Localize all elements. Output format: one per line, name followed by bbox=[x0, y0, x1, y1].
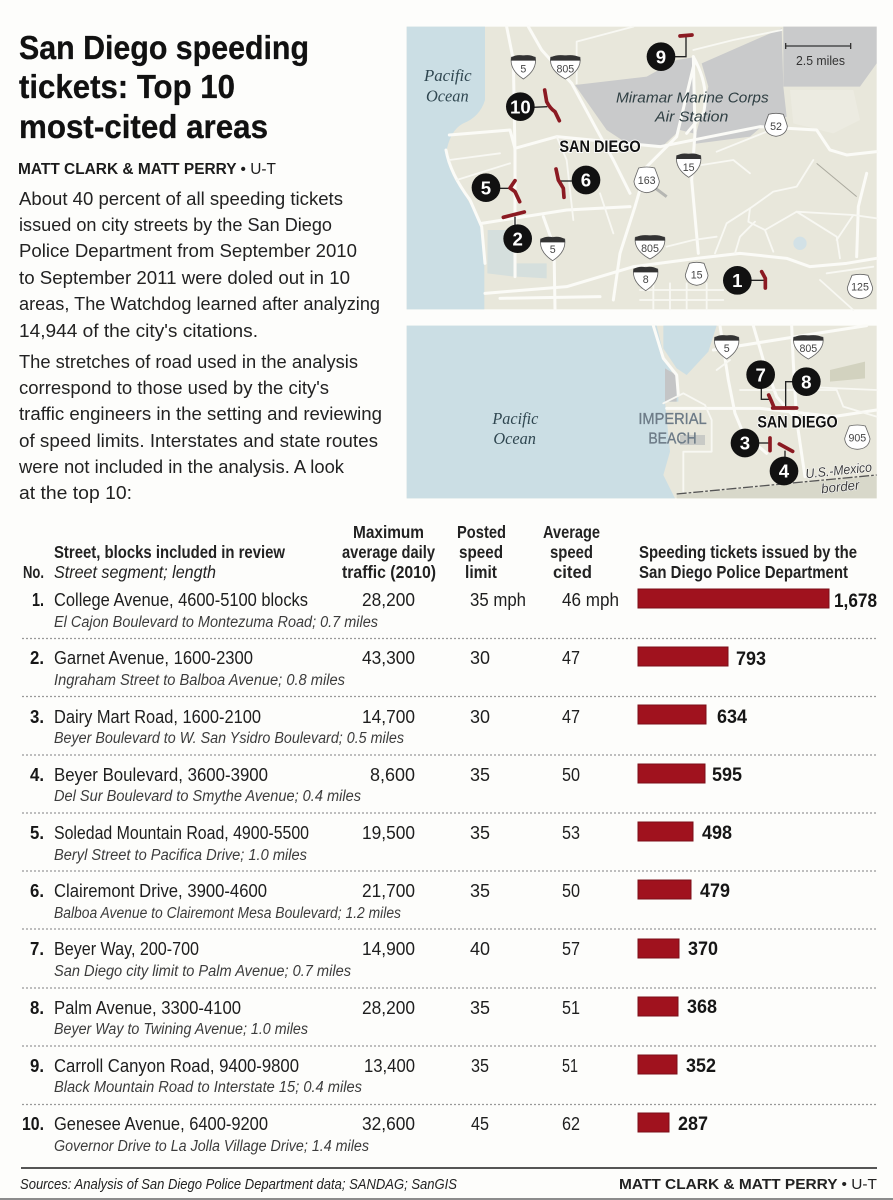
marker 1: College Avenue bbox=[723, 266, 765, 295]
footer: credit: MATT CLARK & MATT PERRY • U-T bbox=[619, 1177, 877, 1193]
bar: 352 tickets bbox=[638, 1055, 677, 1074]
marker 1: College Avenue: 1 bbox=[732, 270, 743, 291]
marker 8: Palm Avenue: 8 bbox=[801, 371, 812, 392]
scale bar bbox=[786, 43, 851, 68]
table header: cited bbox=[553, 562, 592, 582]
row 7: Beyer Way: San Diego city limit to Palm Avenue; 0.7 miles bbox=[54, 963, 351, 980]
row 10: Genesee Avenue bbox=[22, 1113, 708, 1155]
icon: interstate 805 shield bbox=[793, 335, 823, 359]
marker 2: Garnet Avenue: 2 bbox=[512, 228, 523, 249]
row 2: Garnet Avenue: 30 bbox=[470, 647, 490, 668]
row 6: Clairemont Drive bbox=[30, 880, 730, 922]
row 4: Beyer Boulevard: Beyer Boulevard, 3600-3900 bbox=[54, 764, 268, 785]
row 6: Clairemont Drive: 6. bbox=[30, 880, 44, 901]
label: Imperial Beach: BEACH bbox=[648, 430, 697, 447]
row 10: Genesee Avenue: Genesee Avenue, 6400-9200 bbox=[54, 1113, 268, 1134]
icon: interstate 5 shield bbox=[714, 335, 739, 359]
marker 9: Carroll Canyon Road: 9 bbox=[656, 46, 666, 67]
text block: intro paragraph: issued on city streets by the San Diego bbox=[19, 214, 332, 235]
marker 7: Beyer Way: 7 bbox=[755, 364, 766, 385]
row 1: College Avenue: 46 mph bbox=[562, 589, 619, 610]
row 8: Palm Avenue: 368 bbox=[687, 997, 717, 1018]
row 5: Soledad Mountain Road: 35 bbox=[470, 822, 490, 843]
row 8: Palm Avenue: 51 bbox=[562, 997, 580, 1018]
row 3: Dairy Mart Road: 3. bbox=[30, 706, 44, 727]
row 5: Soledad Mountain Road: Beryl Street to Pacifica Drive; 1.0 miles bbox=[54, 847, 307, 864]
row 7: Beyer Way: 14,900 bbox=[362, 938, 415, 959]
row 9: Carroll Canyon Road: 352 bbox=[686, 1056, 716, 1077]
row 2: Garnet Avenue: 2. bbox=[30, 647, 44, 668]
text block: intro paragraph: areas, The Watchdog learned after analyzing bbox=[19, 293, 380, 314]
marker 5: Soledad Mountain Road bbox=[472, 173, 520, 202]
row 3: Dairy Mart Road: Beyer Boulevard to W. San Ysidro Boulevard; 0.5 miles bbox=[54, 730, 404, 747]
marker 3: Dairy Mart Road: 3 bbox=[740, 433, 750, 454]
row 7: Beyer Way: 40 bbox=[470, 938, 490, 959]
text block: intro paragraph: to September 2011 were doled out in 10 bbox=[19, 267, 350, 288]
row 2: Garnet Avenue: Ingraham Street to Balboa Avenue; 0.8 miles bbox=[54, 672, 345, 689]
row 4: Beyer Boulevard: 50 bbox=[562, 764, 580, 785]
icon: route 905 shield bbox=[845, 425, 870, 449]
marker 5: Soledad Mountain Road: 5 bbox=[481, 177, 491, 198]
row 2: Garnet Avenue: 793 bbox=[736, 649, 766, 670]
row 8: Palm Avenue: 28,200 bbox=[362, 997, 415, 1018]
table header: average daily bbox=[342, 542, 435, 562]
text block: intro paragraph: About 40 percent of all speeding tickets bbox=[19, 188, 343, 209]
table header: Street segment; length bbox=[54, 562, 216, 582]
row 2: Garnet Avenue: 43,300 bbox=[362, 647, 415, 668]
row 3: Dairy Mart Road: Dairy Mart Road, 1600-2100 bbox=[54, 706, 261, 727]
row 8: Palm Avenue: 35 bbox=[470, 997, 490, 1018]
icon: route 163 shield bbox=[634, 167, 659, 193]
icon: interstate 805 shield: 805 bbox=[556, 64, 574, 76]
map: south San Diego bbox=[407, 326, 877, 498]
row 4: Beyer Boulevard: 8,600 bbox=[370, 764, 415, 785]
label: Imperial Beach: IMPERIAL bbox=[638, 411, 707, 428]
scale bar: 2.5 miles bbox=[796, 54, 845, 68]
row 2: Garnet Avenue bbox=[30, 647, 766, 689]
bar: 368 tickets bbox=[638, 997, 678, 1016]
icon: interstate 805 shield south: 805 bbox=[641, 243, 659, 255]
marker 7: Beyer Way bbox=[746, 360, 775, 407]
row 6: Clairemont Drive: 35 bbox=[470, 880, 490, 901]
row 9: Carroll Canyon Road: 35 bbox=[471, 1055, 489, 1076]
icon: interstate 5 shield south bbox=[540, 237, 565, 261]
row 9: Carroll Canyon Road: Black Mountain Road to Interstate 15; 0.4 miles bbox=[54, 1079, 362, 1096]
label: Pacific Ocean: Pacific bbox=[491, 409, 539, 428]
text block: methodology paragraph bbox=[18, 351, 382, 503]
bar: 498 tickets bbox=[638, 822, 693, 841]
icon: route 163 shield: 163 bbox=[638, 175, 656, 187]
label: Pacific Ocean: Pacific bbox=[423, 66, 472, 85]
row 1: College Avenue: College Avenue, 4600-5100 blocks bbox=[54, 589, 308, 610]
row 8: Palm Avenue bbox=[30, 997, 717, 1038]
table header: Average bbox=[543, 522, 600, 542]
row 7: Beyer Way: 57 bbox=[562, 938, 580, 959]
marker 9: Carroll Canyon Road bbox=[647, 35, 692, 71]
row 1: College Avenue: 1. bbox=[32, 589, 44, 610]
row 3: Dairy Mart Road: 30 bbox=[470, 706, 490, 727]
title: San Diego speeding bbox=[19, 29, 309, 66]
row 1: College Avenue: 1,678 bbox=[834, 591, 877, 612]
row 9: Carroll Canyon Road bbox=[30, 1055, 716, 1096]
icon: route 905 shield: 905 bbox=[848, 432, 866, 444]
bar: 793 tickets bbox=[638, 647, 728, 666]
text block: methodology paragraph: at the top 10: bbox=[19, 482, 132, 503]
row 3: Dairy Mart Road: 47 bbox=[562, 706, 580, 727]
row 7: Beyer Way: 370 bbox=[688, 939, 718, 960]
icon: interstate 5 shield: 5 bbox=[520, 64, 526, 76]
row 5: Soledad Mountain Road bbox=[30, 822, 732, 864]
text block: intro paragraph: Police Department from September 2010 bbox=[19, 240, 357, 261]
icon: route 15 shield bbox=[685, 262, 708, 285]
text block: methodology paragraph: of speed limits. Interstates and state routes bbox=[19, 430, 378, 451]
icon: route 125 shield bbox=[847, 274, 873, 299]
label: Imperial Beach bbox=[638, 411, 707, 447]
label: Miramar Marine Corps Air Station: Air Station bbox=[654, 109, 728, 126]
table header: Street, blocks included in review bbox=[54, 542, 285, 562]
row 1: College Avenue: El Cajon Boulevard to Montezuma Road; 0.7 miles bbox=[54, 614, 378, 631]
text block: methodology paragraph: traffic engineers in the setting and reviewing bbox=[19, 403, 382, 424]
label: Miramar Marine Corps Air Station bbox=[616, 90, 769, 126]
table header: No. bbox=[23, 562, 44, 582]
table header: speed bbox=[550, 542, 593, 562]
row 2: Garnet Avenue: Garnet Avenue, 1600-2300 bbox=[54, 647, 253, 668]
row 9: Carroll Canyon Road: 13,400 bbox=[364, 1055, 415, 1076]
icon: interstate 15 shield bbox=[676, 153, 701, 177]
row 6: Clairemont Drive: Clairemont Drive, 3900-4600 bbox=[54, 880, 267, 901]
row 8: Palm Avenue: Beyer Way to Twining Avenue; 1.0 miles bbox=[54, 1021, 308, 1038]
table header: Maximum bbox=[353, 522, 424, 542]
icon: interstate 805 shield south bbox=[635, 235, 665, 259]
text block: methodology paragraph: correspond to those used by the city's bbox=[19, 377, 329, 398]
label: San Diego: SAN DIEGO bbox=[757, 413, 838, 432]
table header: speed bbox=[459, 542, 503, 562]
row 6: Clairemont Drive: 479 bbox=[700, 881, 730, 902]
marker 2: Garnet Avenue bbox=[503, 212, 532, 253]
row 7: Beyer Way: Beyer Way, 200-700 bbox=[54, 938, 199, 959]
row 10: Genesee Avenue: Governor Drive to La Jolla Village Drive; 1.4 miles bbox=[54, 1138, 369, 1155]
label: Pacific Ocean: Ocean bbox=[493, 429, 536, 448]
table header bbox=[23, 522, 857, 582]
row 3: Dairy Mart Road: 14,700 bbox=[362, 706, 415, 727]
row 5: Soledad Mountain Road: 53 bbox=[562, 822, 580, 843]
icon: interstate 5 shield bbox=[511, 55, 536, 79]
row 1: College Avenue: 35 mph bbox=[470, 589, 526, 610]
row 10: Genesee Avenue: 287 bbox=[678, 1114, 708, 1135]
icon: interstate 805 shield: 805 bbox=[799, 343, 817, 355]
marker 4: Beyer Boulevard: 4 bbox=[779, 461, 790, 482]
row 5: Soledad Mountain Road: 5. bbox=[30, 822, 44, 843]
title: most-cited areas bbox=[19, 108, 268, 145]
row 8: Palm Avenue: Palm Avenue, 3300-4100 bbox=[54, 997, 241, 1018]
icon: route 125 shield: 125 bbox=[851, 281, 869, 293]
row 10: Genesee Avenue: 45 bbox=[471, 1113, 489, 1134]
table header: traffic (2010) bbox=[342, 562, 436, 582]
label: Pacific Ocean bbox=[423, 66, 472, 106]
row 4: Beyer Boulevard: 595 bbox=[712, 765, 742, 786]
icon: route 52 shield bbox=[765, 113, 787, 136]
icon: route 52 shield: 52 bbox=[770, 121, 782, 133]
row 6: Clairemont Drive: Balboa Avenue to Clairemont Mesa Boulevard; 1.2 miles bbox=[54, 905, 401, 922]
icon: interstate 8 shield bbox=[633, 267, 658, 291]
row 1: College Avenue: 28,200 bbox=[362, 589, 415, 610]
row 2: Garnet Avenue: 47 bbox=[562, 647, 580, 668]
row 4: Beyer Boulevard: 4. bbox=[30, 764, 44, 785]
footer: sources: Sources: Analysis of San Diego Police Department data; SANDAG; SanGIS bbox=[20, 1176, 457, 1193]
row 1: College Avenue bbox=[32, 589, 877, 631]
row 4: Beyer Boulevard: Del Sur Boulevard to Smythe Avenue; 0.4 miles bbox=[54, 788, 361, 805]
icon: interstate 805 shield bbox=[550, 55, 580, 79]
text block: intro paragraph bbox=[19, 188, 380, 341]
table header: Posted bbox=[457, 522, 506, 542]
row 6: Clairemont Drive: 21,700 bbox=[362, 880, 415, 901]
bar: 479 tickets bbox=[638, 880, 691, 899]
row 9: Carroll Canyon Road: 9. bbox=[30, 1055, 44, 1076]
label: U.S.-Mexico border bbox=[805, 459, 873, 496]
text block: methodology paragraph: The stretches of road used in the analysis bbox=[19, 351, 358, 372]
icon: interstate 5 shield south: 5 bbox=[550, 244, 556, 256]
title bbox=[19, 29, 309, 145]
row 10: Genesee Avenue: 10. bbox=[22, 1113, 44, 1134]
text block: intro paragraph: 14,944 of the city's citations. bbox=[19, 320, 258, 341]
map: north San Diego bbox=[407, 27, 877, 310]
label: Pacific Ocean: Ocean bbox=[426, 87, 469, 106]
bar: 1,678 tickets bbox=[638, 589, 829, 608]
marker 3: Dairy Mart Road bbox=[731, 429, 770, 457]
bar: 370 tickets bbox=[638, 939, 679, 958]
row 6: Clairemont Drive: 50 bbox=[562, 880, 580, 901]
label: U.S.-Mexico border: border bbox=[820, 477, 861, 496]
marker 8: Palm Avenue bbox=[773, 367, 821, 408]
row 10: Genesee Avenue: 62 bbox=[562, 1113, 580, 1134]
row 7: Beyer Way: 7. bbox=[30, 938, 44, 959]
bar: 287 tickets bbox=[638, 1113, 669, 1132]
row 8: Palm Avenue: 8. bbox=[30, 997, 44, 1018]
table header: limit bbox=[465, 562, 497, 582]
bar: 595 tickets bbox=[638, 764, 705, 783]
text block: methodology paragraph: were not included in the analysis. A look bbox=[18, 456, 345, 477]
row 10: Genesee Avenue: 32,600 bbox=[362, 1113, 415, 1134]
bar: 634 tickets bbox=[638, 705, 706, 724]
icon: interstate 5 shield: 5 bbox=[724, 343, 730, 355]
icon: interstate 8 shield: 8 bbox=[643, 274, 649, 286]
row 4: Beyer Boulevard bbox=[30, 764, 742, 805]
row 9: Carroll Canyon Road: Carroll Canyon Road, 9400-9800 bbox=[54, 1055, 299, 1076]
marker 6: Clairemont Drive bbox=[556, 166, 600, 197]
title: tickets: Top 10 bbox=[19, 68, 235, 105]
icon: interstate 15 shield: 15 bbox=[683, 162, 695, 174]
label: Pacific Ocean bbox=[491, 409, 539, 448]
marker 10: Genesee Avenue: 10 bbox=[510, 96, 531, 117]
row 9: Carroll Canyon Road: 51 bbox=[562, 1055, 578, 1076]
row 5: Soledad Mountain Road: 498 bbox=[702, 823, 732, 844]
row 7: Beyer Way bbox=[30, 938, 718, 980]
table header: San Diego Police Department bbox=[639, 562, 848, 582]
row 3: Dairy Mart Road: 634 bbox=[717, 707, 747, 728]
icon: route 15 shield: 15 bbox=[691, 270, 703, 282]
marker 6: Clairemont Drive: 6 bbox=[581, 170, 591, 191]
row 5: Soledad Mountain Road: 19,500 bbox=[362, 822, 415, 843]
marker 4: Beyer Boulevard bbox=[770, 444, 798, 485]
row 5: Soledad Mountain Road: Soledad Mountain Road, 4900-5500 bbox=[54, 822, 309, 843]
table header: Speeding tickets issued by the bbox=[639, 542, 857, 562]
row 4: Beyer Boulevard: 35 bbox=[470, 764, 490, 785]
label: U.S.-Mexico border: U.S.-Mexico bbox=[805, 459, 873, 481]
label: San Diego: SAN DIEGO bbox=[559, 137, 641, 156]
label: Miramar Marine Corps Air Station: Miramar Marine Corps bbox=[616, 90, 769, 107]
marker 10: Genesee Avenue bbox=[506, 90, 559, 121]
byline: MATT CLARK & MATT PERRY • U-T bbox=[18, 161, 277, 178]
row 3: Dairy Mart Road bbox=[30, 705, 747, 747]
